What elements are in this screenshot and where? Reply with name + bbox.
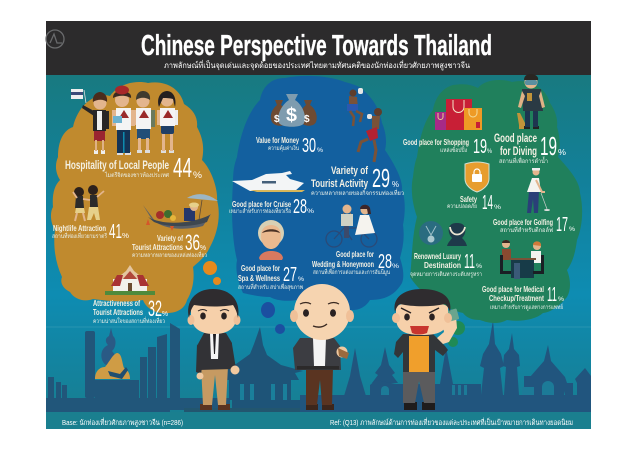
stat: shopping: แหล่งช้อปปิ้ง: [440, 144, 467, 154]
panel: green thought cloud: [410, 80, 582, 347]
stat: safety: %: [494, 204, 501, 211]
stat: luxury: 11: [464, 251, 475, 273]
stat: variety of attractions: ความหลากหลายของแหล่งท่องเที่ยว: [132, 251, 207, 259]
icon: floating market boat: [143, 194, 218, 231]
stat: golfing: 17: [556, 214, 568, 236]
stat: variety of attractions: %: [200, 245, 206, 252]
stat: cruise: Good place for Cruise: [232, 200, 291, 209]
Buddha statue: [95, 328, 130, 379]
stat: cruise: [229, 196, 314, 218]
stat: nightlife: 41: [109, 221, 122, 243]
tourist 4: [157, 91, 178, 153]
stat: spa: สถานที่สำหรับ สปาเพื่อสุขภาพ: [238, 283, 303, 291]
footnote: reference: Ref: (Q13) ภาพลักษณ์ด้านการท่องเที่ยวของแต่ละประเทศที่เป็นเป้าหมายการเดินทางยอดนิยม: [330, 417, 573, 427]
icon: money bags: $: [274, 114, 280, 125]
stat: wedding: สถานที่เพื่อการแต่งงานและการฮันนีมูน: [313, 268, 390, 276]
icon: flag: [71, 89, 86, 103]
stat: attractiveness: ความน่าสนใจของสถานที่ท่องเที่ยว: [93, 317, 165, 325]
stat: value for money: [256, 135, 323, 157]
stat: hospitality: Hospitality of Local People: [65, 158, 169, 172]
stat: wedding: [312, 249, 399, 276]
skyline: central pavilion: [184, 327, 354, 412]
character: bald man: [290, 284, 354, 410]
panel: orange thought cloud: [51, 82, 221, 313]
icon: medical checkup: [500, 240, 544, 279]
stat: tourist activity: Variety of: [331, 165, 368, 177]
stat: shopping: Good place for Shopping: [403, 138, 469, 147]
stat: nightlife: %: [122, 233, 129, 240]
stat: nightlife: สถานที่ท่องเที่ยวยามราตรี: [52, 232, 108, 240]
stat: attractiveness: Tourist Attractions: [93, 307, 143, 317]
stat: attractiveness: %: [162, 311, 168, 318]
stat: medical: Good place for Medical: [482, 284, 544, 294]
icon: safety lock shield: [465, 162, 489, 192]
stat: tourist activity: Tourist Activity: [311, 178, 369, 190]
stat: spa: %: [298, 276, 304, 283]
tourist 3: [133, 91, 155, 153]
stat: variety of attractions: [132, 230, 207, 259]
footnote: base: Base: นักท่องเที่ยวศักยภาพสูงชาวจีน (n=286): [62, 417, 183, 427]
character: man holding money: [392, 289, 459, 410]
stat: medical: เหมาะสำหรับการดูแลทางการแพทย์: [490, 303, 563, 311]
stat: value for money: %: [317, 147, 323, 154]
icon: dancers: [73, 185, 104, 221]
stat: attractiveness: Attractiveness of: [93, 298, 140, 308]
icon: spa woman: [258, 220, 284, 260]
icon: shopping bags: [435, 99, 482, 130]
stat: wedding: Good place for: [336, 249, 374, 259]
stat: wedding: %: [392, 263, 399, 270]
thought dots: [261, 302, 285, 334]
logo emblem: [46, 30, 64, 48]
stat: hospitality: ไมตรีจิตของชาวท้องประเทศ: [104, 171, 169, 179]
stat: shopping: 19: [473, 136, 487, 158]
stat: hospitality: 44: [173, 152, 192, 183]
stat: luxury: [410, 251, 482, 278]
icon: wedding couple on bicycle: [326, 204, 377, 247]
stat: diving: for Diving: [500, 144, 537, 158]
footer strip: [46, 412, 591, 429]
stat: nightlife: Nightlife Attraction: [53, 223, 106, 233]
stat: tourist activity: [311, 163, 404, 197]
stat: value for money: 30: [302, 135, 316, 157]
stat: golfing: %: [569, 226, 575, 233]
character: man in dark jacket: [188, 289, 240, 410]
icon: Thai temple: [105, 265, 155, 295]
stat: diving: Good place: [494, 131, 537, 145]
stat: luxury: Destination: [424, 260, 461, 270]
stat: variety of attractions: Variety of: [157, 233, 183, 243]
stat: spa: Good place for: [241, 263, 280, 273]
thought dots: [448, 321, 465, 347]
icon: money bags: [271, 94, 317, 127]
stat: tourist activity: %: [392, 180, 399, 189]
stat: cruise: เหมาะสำหรับการท่องเที่ยวเรือ: [229, 207, 291, 215]
stat: attractiveness: 32: [148, 296, 162, 321]
skyline: left temple and Buddha: [46, 323, 230, 416]
stat: medical: 11: [547, 284, 557, 306]
stat: value for money: ความคุ้มค่าเงิน: [268, 145, 299, 152]
tourist 2: [112, 86, 135, 155]
stat: spa: 27: [283, 264, 297, 286]
icon: tourists group: [71, 86, 178, 155]
stat: spa: Spa & Wellness: [238, 273, 280, 283]
stat: spa: [238, 263, 304, 291]
header band: [46, 21, 591, 75]
stat: golfing: สถานที่สำหรับตีกอล์ฟ: [500, 226, 553, 234]
stat: tourist activity: ความหลากหลายของกิจกรรมท่องเที่ยว: [311, 189, 404, 197]
stat: medical: Checkup/Treatment: [489, 293, 544, 303]
icon: diver: [517, 74, 545, 129]
stat: hospitality: [65, 152, 202, 183]
stat: medical: [482, 284, 564, 311]
stat: tourist activity: 29: [372, 163, 390, 193]
stat: variety of attractions: Tourist Attractions: [132, 242, 183, 252]
stat: shopping: [403, 136, 492, 158]
stat: safety: ความปลอดภัย: [447, 203, 477, 210]
stat: medical: %: [558, 296, 564, 303]
stat: golfing: Good place for Golfing: [493, 218, 553, 227]
stat: cruise: %: [307, 208, 314, 215]
icon: money bags: $: [286, 105, 297, 126]
stat: variety of attractions: 36: [185, 230, 200, 255]
stat: safety: [447, 192, 501, 214]
stat: wedding: 28: [378, 251, 392, 273]
stat: diving: สถานที่เพื่อการดำน้ำ: [499, 155, 548, 165]
stat: safety: 14: [482, 192, 493, 214]
stat: nightlife: [52, 221, 129, 243]
stat: diving: 19: [540, 131, 557, 161]
stat: shopping: %: [487, 148, 492, 155]
stat: cruise: 28: [293, 196, 307, 218]
stat: hospitality: %: [193, 170, 202, 180]
icon: Muay Thai fighters: [347, 88, 382, 162]
stat: attractiveness: [93, 296, 168, 325]
stat: diving: %: [558, 148, 566, 157]
icon: luxury necklace: [419, 221, 467, 246]
icon: yacht: [232, 171, 305, 192]
icon: money bags: $: [304, 114, 310, 125]
stat: golfing: [493, 214, 575, 236]
stat: value for money: Value for Money: [256, 136, 299, 145]
stat: safety: Safety: [460, 195, 477, 204]
stat: wedding: Wedding & Honeymoon: [312, 259, 374, 269]
subtitle: ภาพลักษณ์ที่เป็นจุดเด่นและจุดด้อยของประเทศไทยตามทัศนคติของนักท่องเที่ยวศักยภาพสูงชาวจีน: [164, 59, 470, 71]
main background panel: [46, 75, 591, 429]
panel: blue thought cloud: [232, 76, 405, 334]
skyline: right temples: [300, 320, 591, 412]
stat: luxury: จุดหมายการเดินทางระดับหรูหรา: [410, 271, 482, 278]
tourist 1: [82, 92, 109, 154]
stat: diving: [494, 131, 566, 165]
thought dots: [203, 261, 221, 285]
stat: luxury: Renowned Luxury: [414, 251, 461, 261]
stat: luxury: %: [476, 263, 482, 270]
icon: golfer: [527, 168, 550, 213]
